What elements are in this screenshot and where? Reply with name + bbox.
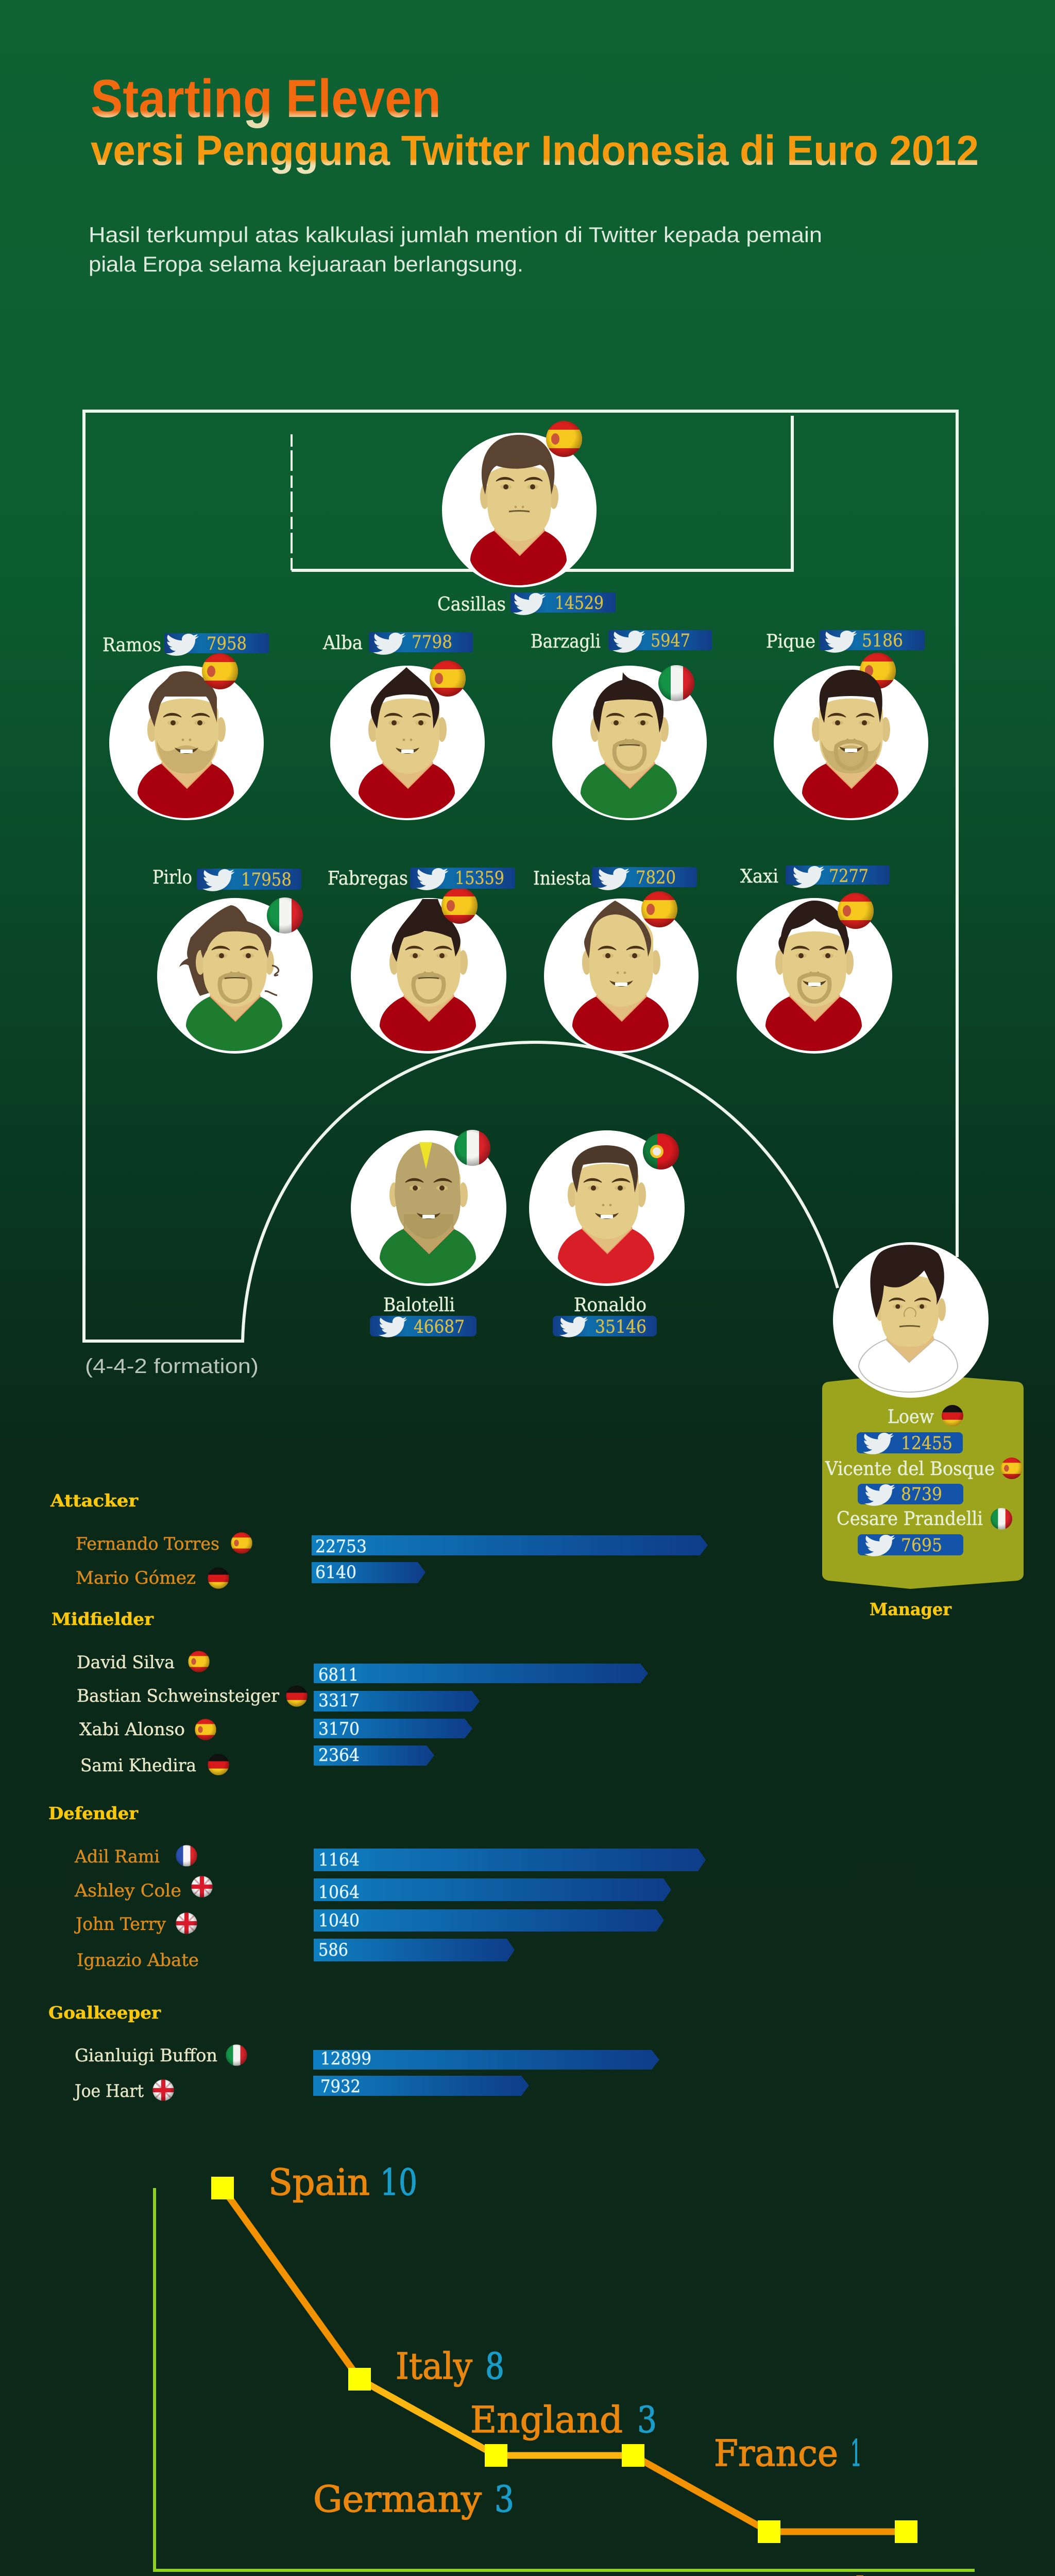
player: Alba xyxy=(322,632,485,820)
intro text: Hasil terkumpul atas kalkulasi jumlah mention di Twitter kepada pemain xyxy=(89,223,822,247)
row: Bastian Schweinsteiger: 3317 xyxy=(318,1690,360,1711)
player: Fabregas xyxy=(328,868,515,1054)
row: Ashley Cole xyxy=(74,1876,671,1903)
manager: Cesare Prandelli xyxy=(837,1508,1013,1556)
chart label: Germany: Germany xyxy=(313,2478,482,2520)
row: Joe Hart: 7932 xyxy=(320,2076,361,2097)
row: Xabi Alonso: 3170 xyxy=(318,1719,360,1739)
player: Balotelli: Balotelli xyxy=(383,1295,455,1316)
chart label: Spain: 10 xyxy=(380,2161,417,2204)
manager portrait: Loew xyxy=(833,1242,989,1398)
chart label: Italy: 8 xyxy=(485,2345,504,2387)
chart label: England: 3 xyxy=(637,2399,657,2441)
heading: Attacker: Attacker xyxy=(50,1490,139,1511)
row: Ashley Cole: 1064 xyxy=(318,1882,360,1903)
title: Starting Eleven xyxy=(91,69,441,129)
row: Adil Rami: 1164 xyxy=(318,1850,360,1870)
row: Mario Gómez: 6140 xyxy=(315,1562,356,1583)
row: Mario Gómez: Mario Gómez xyxy=(76,1568,196,1588)
chart label: England: England xyxy=(470,2399,623,2441)
player: Alba: 7798 xyxy=(412,632,452,653)
row: Xabi Alonso xyxy=(79,1719,472,1740)
player: Fabregas: Fabregas xyxy=(328,868,408,889)
player: Ronaldo xyxy=(529,1130,685,1337)
player: Alba: Alba xyxy=(322,633,363,654)
row: Fernando Torres xyxy=(76,1532,708,1557)
row: Adil Rami xyxy=(74,1845,706,1871)
manager: Vicente del Bosque xyxy=(825,1458,1023,1506)
player: Xaxi: 7277 xyxy=(829,866,869,887)
player: Balotelli xyxy=(351,1130,506,1337)
manager: Loew: Loew xyxy=(888,1406,934,1428)
row: Bastian Schweinsteiger xyxy=(77,1685,480,1711)
player: Iniesta: Iniesta xyxy=(533,868,591,889)
player: Xaxi xyxy=(737,866,892,1054)
row: Sami Khedira: Sami Khedira xyxy=(80,1755,196,1776)
player: Ramos xyxy=(103,633,269,820)
heading: Goalkeeper: Goalkeeper xyxy=(48,2003,161,2023)
row: Gianluigi Buffon xyxy=(75,2044,659,2070)
player: Xaxi: Xaxi xyxy=(740,866,778,887)
chart label: Spain: Spain xyxy=(268,2161,370,2204)
player: Ronaldo: 35146 xyxy=(595,1317,646,1337)
title: versi Pengguna Twitter Indonesia di Euro 2012 xyxy=(91,127,979,174)
chart label: Germany: 3 xyxy=(495,2478,514,2520)
row: John Terry xyxy=(74,1909,664,1935)
manager: Cesare Prandelli: Cesare Prandelli xyxy=(837,1509,983,1530)
player: Pique: Pique xyxy=(766,631,815,652)
player: Pirlo: Pirlo xyxy=(152,867,192,888)
player: Pirlo: 17958 xyxy=(241,870,292,890)
row: John Terry: 1040 xyxy=(318,1910,360,1931)
chart label: Spain xyxy=(268,2161,417,2204)
panel: managers xyxy=(822,1242,1024,1589)
heading: Manager: Manager xyxy=(870,1599,952,1619)
manager: Vicente del Bosque: 8739 xyxy=(901,1484,942,1505)
row: Fernando Torres: 22753 xyxy=(315,1536,367,1557)
player: Casillas: 14529 xyxy=(555,593,604,614)
intro text xyxy=(89,223,822,276)
row: Ignazio Abate xyxy=(77,1939,515,1971)
row: John Terry: John Terry xyxy=(74,1914,166,1935)
row: Sami Khedira xyxy=(80,1745,434,1776)
row: Ignazio Abate: 586 xyxy=(318,1940,348,1960)
player: Iniesta xyxy=(533,867,699,1053)
player: Barzagli xyxy=(531,630,712,820)
row: David Silva xyxy=(77,1651,648,1685)
manager: Cesare Prandelli: 7695 xyxy=(901,1535,942,1556)
row: Bastian Schweinsteiger: Bastian Schweinsteiger xyxy=(77,1686,280,1706)
player: Ronaldo: Ronaldo xyxy=(574,1295,646,1316)
chart label: France: France xyxy=(714,2432,838,2475)
row: Gianluigi Buffon: Gianluigi Buffon xyxy=(75,2045,217,2066)
heading: Defender: Defender xyxy=(48,1803,139,1823)
manager: Loew: 12455 xyxy=(901,1433,952,1454)
row: David Silva: David Silva xyxy=(77,1652,175,1673)
player: Barzagli: Barzagli xyxy=(531,631,601,652)
player: Iniesta: 7820 xyxy=(636,868,676,888)
player: Barzagli: 5947 xyxy=(651,631,690,651)
line chart: total player by country xyxy=(155,2161,975,2576)
player: Fabregas: 15359 xyxy=(455,868,504,889)
row: Ignazio Abate: Ignazio Abate xyxy=(77,1950,199,1971)
manager: Loew xyxy=(857,1405,963,1454)
row: Adil Rami: Adil Rami xyxy=(74,1846,160,1867)
heading: Midfielder: Midfielder xyxy=(52,1609,154,1629)
formation label: (4-4-2 formation) xyxy=(85,1355,259,1378)
row: Gianluigi Buffon: 12899 xyxy=(320,2048,371,2069)
player: Casillas: Casillas xyxy=(437,594,506,615)
row: Sami Khedira: 2364 xyxy=(318,1745,360,1766)
player: Pirlo xyxy=(152,867,313,1054)
row: Mario Gómez xyxy=(76,1562,426,1589)
player: Casillas xyxy=(437,421,616,615)
title xyxy=(91,69,979,174)
row: Ashley Cole: Ashley Cole xyxy=(74,1880,181,1901)
player: Ramos: 7958 xyxy=(207,634,247,654)
row: Xabi Alonso: Xabi Alonso xyxy=(79,1719,185,1740)
row: David Silva: 6811 xyxy=(318,1665,359,1685)
player: Pique: 5186 xyxy=(862,631,903,651)
line chart: total player by country: 1 xyxy=(850,2432,862,2475)
manager: Vicente del Bosque: Vicente del Bosque xyxy=(825,1459,995,1480)
player: Balotelli: 46687 xyxy=(414,1317,465,1337)
chart line xyxy=(223,2188,906,2532)
row: Joe Hart: Joe Hart xyxy=(73,2081,144,2102)
intro text: piala Eropa selama kejuaraan berlangsung. xyxy=(89,252,523,276)
chart label: Italy: Italy xyxy=(396,2345,472,2387)
chart axes xyxy=(155,2188,975,2570)
row: Fernando Torres: Fernando Torres xyxy=(76,1534,219,1554)
row: Joe Hart xyxy=(73,2076,529,2102)
football pitch lines xyxy=(84,411,957,1341)
chart markers xyxy=(211,2177,917,2543)
player: Ramos: Ramos xyxy=(103,635,161,656)
player: Pique xyxy=(766,630,928,820)
